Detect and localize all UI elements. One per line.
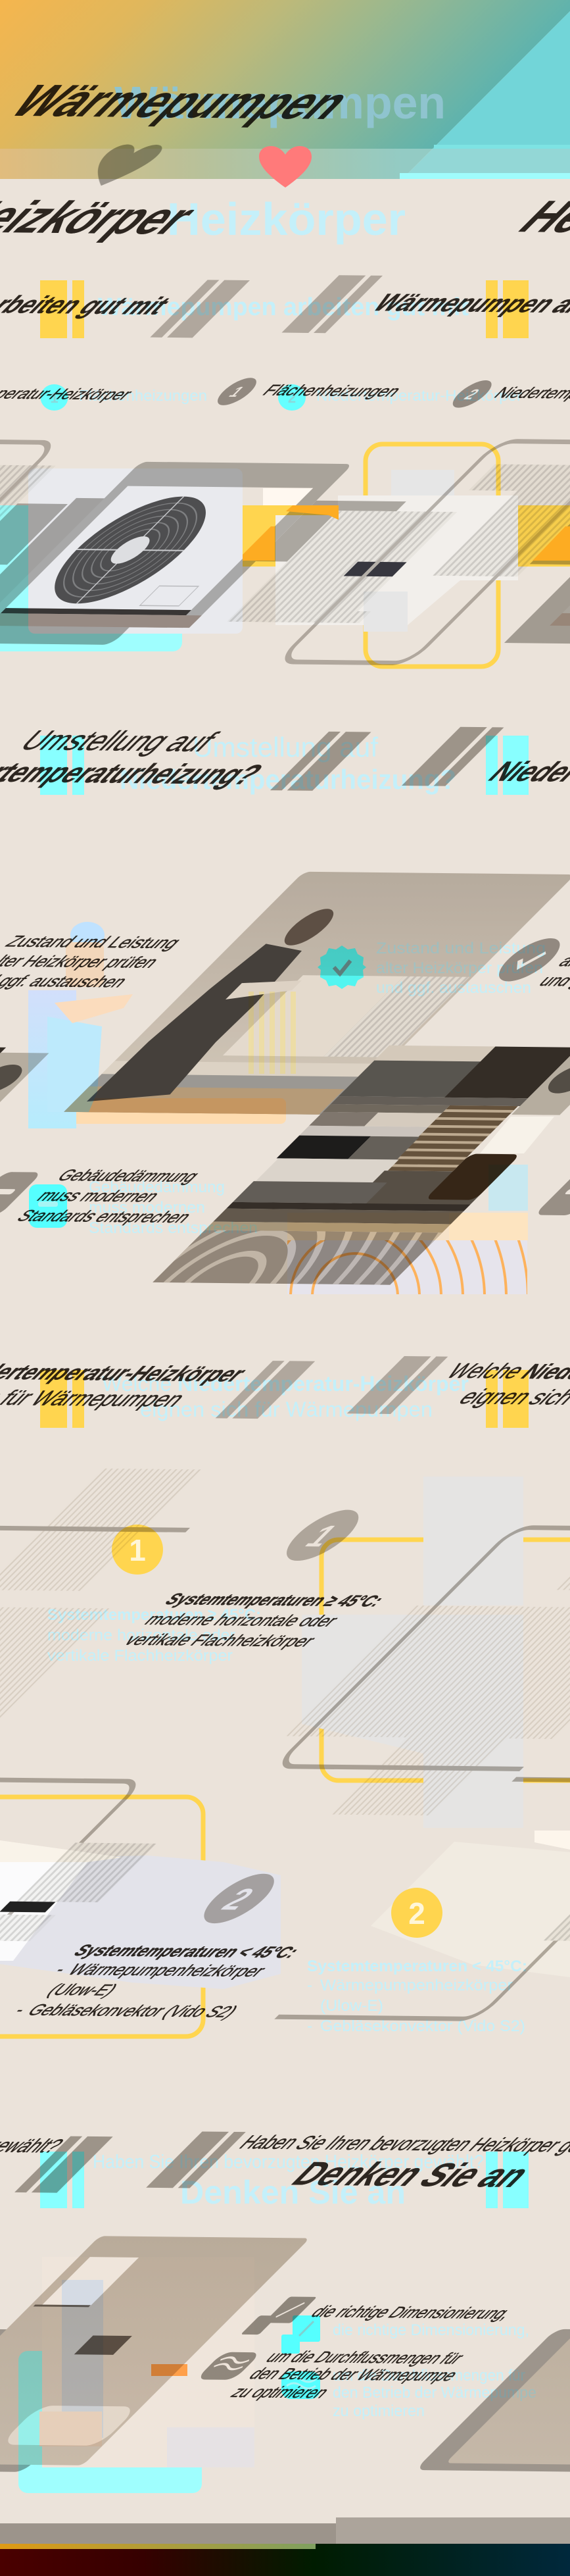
sheared text band 2 [0, 755, 570, 1413]
section 4 heading [93, 2152, 484, 2211]
item: Niedertemperatur-Heizkörper [278, 384, 522, 411]
check badge [318, 946, 366, 989]
text: check radiators [376, 940, 546, 997]
section 4 heading: Haben Sie Ihren bevorzugten Heizkörper gewählt? [93, 2152, 484, 2173]
sheared text band 2: muss modernen [32, 1187, 164, 1205]
text: building insulation: muss modernen [89, 1199, 205, 1217]
number badge 1 [112, 1525, 163, 1575]
sheared text band 4: zu optimieren [226, 2384, 334, 2402]
item: Flächenheizungen: Flächenheizungen [79, 387, 207, 404]
text: sizing hint [333, 2321, 536, 2420]
text: option 1: moderne horizontale oder [47, 1627, 235, 1644]
sheared text band 3: vertikale Flachheizkörper [120, 1631, 320, 1650]
panel: cyan backing behind bathroom [18, 2351, 202, 2493]
sheared text band 3: (Ulow-E) [43, 1981, 122, 1999]
sheared text band 3: 2 [213, 1882, 264, 1916]
sheared text band 4: Denken Sie an [282, 2155, 542, 2194]
sheared cream radiator [371, 1831, 570, 1977]
sheared text band 1 [0, 190, 570, 991]
icon: water flow [281, 2371, 320, 2399]
sheared text band 3: - [9, 2002, 32, 2019]
text: option 2 [307, 1957, 527, 2035]
text: sizing hint: um die Durchflussmengen für [333, 2367, 525, 2385]
sheared text band 2: Gebäudedämmung [52, 1167, 204, 1186]
text: building insulation [89, 1178, 258, 1237]
text: option 2: - [307, 2017, 312, 2035]
text: option 1: Systemtemperaturen ≥ 45°C: [47, 1606, 261, 1624]
sheared text band 4: den Betrieb der Wärmepumpe [244, 2365, 463, 2385]
photo: bedroom ghost [287, 1117, 554, 1294]
photo: heat pump ghost [28, 468, 243, 634]
photo: man at radiator ghost [28, 922, 296, 1128]
text: option 1 [47, 1606, 261, 1665]
sheared text band 4: die richtige Dimensionierung, [306, 2303, 517, 2323]
section 2 heading [120, 732, 456, 795]
text: option 2: - [307, 1977, 312, 1994]
footer band [0, 2517, 570, 2576]
section 1 accent bars [40, 280, 529, 338]
fan convector ghost [0, 1840, 281, 1989]
title: Wärmepumpen: Wärmepumpen [114, 77, 446, 128]
item: Flächenheizungen [41, 384, 207, 411]
sheared text band 0 [0, 76, 444, 403]
sheared text band 1: Flächenheizungen [258, 382, 406, 399]
radiator option 1 ghost [302, 1477, 523, 1828]
section 4 accent bars [40, 2152, 529, 2208]
insulation icon [29, 1184, 67, 1228]
section 1 heading: Wärmepumpen arbeiten gut mit [98, 293, 469, 320]
text: sizing hint: den Betrieb der Wärmepumpe [333, 2384, 536, 2402]
text: option 2: Gebläsekonvektor (Vido S2) [320, 2017, 525, 2035]
sheared text band 3: Wärmepumpenheizkörper [62, 1961, 271, 1981]
item: Flächenheizungen: 1 [50, 390, 59, 406]
section 2 heading: Niedertemperaturheizung? [120, 764, 456, 795]
photo: radiators ghost [275, 470, 518, 632]
sheared text band 4: um die Durchflussmengen für [261, 2348, 469, 2367]
section 3 heading [102, 1372, 469, 1421]
sheared text band 2: Standards entsprechen [12, 1207, 196, 1226]
item: Niedertemperatur-Heizkörper: Niedertemperatur-Heizkörper [316, 387, 522, 404]
sheared text band 0: Wärmepumpen [0, 76, 366, 128]
text: option 2: (Ulow-E) [320, 1997, 383, 2015]
section 2 heading: Umstellung auf [193, 732, 378, 763]
photo: bathroom ghost [39, 2257, 254, 2467]
text: option 2: Wärmepumpenheizkörper [320, 1977, 513, 1994]
sheared text band 1: Umstellung auf [12, 724, 226, 757]
yellow frame option 1 [321, 1540, 570, 1780]
orange overlap on yellow backing [243, 505, 570, 561]
number badge 2 [391, 1888, 442, 1938]
icon: heart [259, 146, 312, 188]
section 3 heading: Welche Niedertemperatur-Heizkörper [102, 1372, 469, 1396]
text: building insulation: Gebäudedämmung [89, 1178, 225, 1196]
sheared text band 1: 2 [460, 386, 484, 403]
sheared text band 3: Systemtemperaturen ≥ 45°C: [160, 1591, 389, 1610]
section 3 heading: eignen sich für Wärmepumpen [140, 1398, 433, 1421]
text: option 1: vertikale Flachheizkörper [47, 1647, 233, 1665]
text: sizing hint: zu optimieren [333, 2402, 425, 2420]
heat pump panel highlight [263, 488, 313, 505]
text: building insulation: Standards entsprechen [89, 1219, 258, 1237]
sheared text band 3: - [50, 1961, 72, 1979]
section 3 accent bars [40, 1370, 529, 1428]
yellow frame option 2 [0, 1797, 203, 2036]
sheared text band 3: moderne horizontale oder [139, 1611, 343, 1630]
text: sizing hint: die richtige Dimensionierung, [333, 2321, 529, 2339]
sheared text band 4 [0, 2132, 570, 2403]
panel: cyan backing behind heat pump [0, 505, 182, 651]
icon: dimension arrow [281, 2315, 320, 2354]
number badge 2: 2 [408, 1896, 425, 1931]
section 4 heading: Denken Sie an [180, 2174, 406, 2211]
header gradient band [0, 0, 570, 179]
panel: yellow radiator frame [366, 444, 498, 667]
sheared text band 3: 1 [297, 1519, 347, 1553]
panel: yellow backing behind radiators [243, 505, 570, 567]
text: check radiators: alter Heizkörper prüfen [376, 959, 543, 977]
title: Heizkörper: Heizkörper [167, 193, 406, 245]
sheared text band 1: Zustand und Leistung [1, 933, 185, 952]
sheared text band 3 [0, 1359, 570, 2158]
sheared text band 3: Gebläsekonvektor (Vido S2) [22, 2002, 243, 2021]
text: check radiators: und ggf. austauschen [376, 979, 531, 997]
section 2 accent bars [40, 736, 529, 795]
text: check radiators: Zustand und Leistung [376, 940, 546, 957]
text: option 2: Systemtemperaturen < 45°C: [307, 1957, 527, 1975]
sheared text band 1: 1 [225, 384, 249, 400]
number badge 1: 1 [129, 1533, 146, 1567]
item: Niedertemperatur-Heizkörper: 2 [288, 390, 296, 406]
sheared text band 3: Systemtemperaturen < 45°C: [68, 1942, 304, 1961]
